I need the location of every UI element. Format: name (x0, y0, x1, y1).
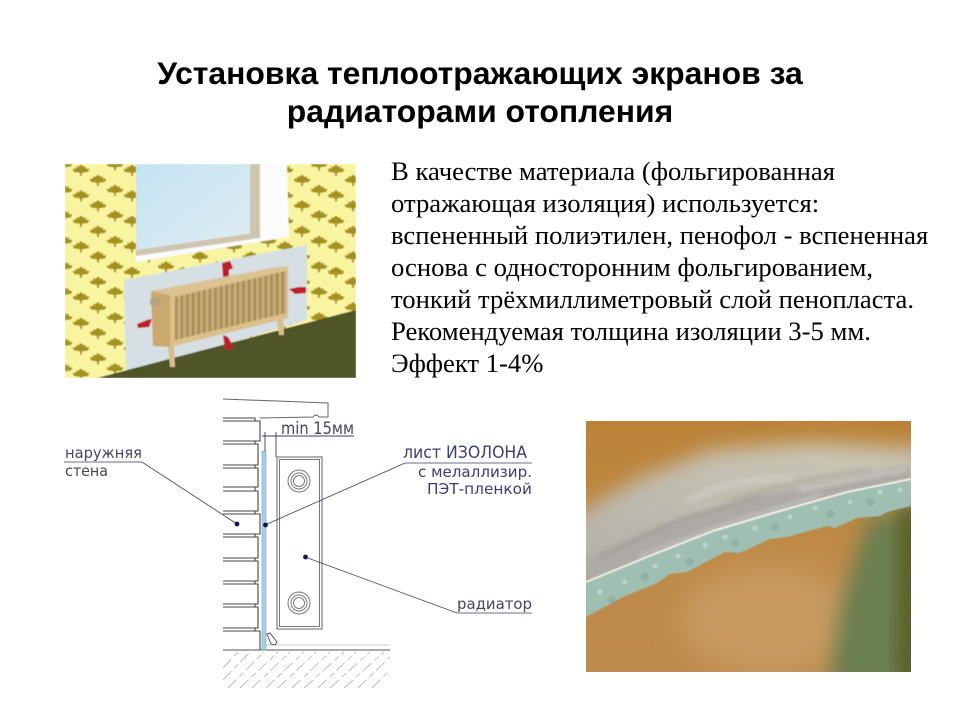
foil surface (560, 442, 935, 595)
white foil edge (586, 479, 911, 582)
radiator slats (175, 271, 286, 340)
radiator body (277, 457, 322, 629)
bracket (267, 633, 277, 645)
label: min distance: min 15мм (281, 419, 354, 439)
text block: material description: Рекомендуемая толщина изоляции 3-5 мм. (391, 316, 871, 346)
label: PET film: ПЭТ-пленкой (427, 480, 532, 498)
window sill (223, 399, 328, 418)
green blurred object (818, 506, 911, 672)
leader dots (235, 522, 308, 559)
label: metallized: с мелаллизир. (418, 463, 532, 481)
leader lines (64, 462, 532, 613)
window glass (136, 164, 250, 250)
foam texture (598, 488, 902, 604)
window frame side (250, 164, 260, 234)
wall bricks (223, 418, 390, 650)
diagram labels (65, 419, 532, 613)
insulation sheet (262, 451, 266, 650)
radiator fittings (288, 470, 310, 614)
floor (97, 310, 356, 378)
photo: foil-faced foam sample (586, 421, 911, 672)
wallpaper (65, 164, 356, 378)
label: wall second line: стена (65, 462, 108, 480)
dimension lines (262, 432, 354, 457)
title: радиаторами отопления (287, 93, 673, 129)
window reveal (136, 164, 289, 262)
label: isolon sheet: лист ИЗОЛОНА (403, 443, 527, 463)
radiator front frame (170, 268, 288, 347)
red arrows (137, 261, 306, 350)
text block: material description: вспененный полиэтилен, пенофол - вспененная (391, 220, 928, 250)
text block: material description: В качестве материала (фольгированная (391, 156, 835, 186)
radiator legs (168, 344, 175, 367)
radiator top (151, 266, 288, 295)
floor hatching (223, 652, 392, 688)
text block: material description: Эффект 1-4% (391, 348, 543, 378)
label: radiator: радиатор (457, 595, 532, 613)
text block: material description: основа с односторонним фольгированием, (391, 252, 873, 282)
image: radiator with reflective screen on wallpapered wall (65, 164, 356, 378)
label: outer wall: наружняя (65, 444, 142, 462)
text block: material description (391, 156, 928, 378)
radiator side (151, 291, 170, 347)
foam edge (586, 480, 911, 617)
photo background (586, 421, 911, 672)
text block: material description: тонкий трёхмиллиметровый слой пенопласта. (391, 284, 914, 314)
diagram: radiator installation section (64, 399, 532, 688)
insulation panel (124, 245, 307, 374)
valve (150, 298, 161, 306)
text block: material description: отражающая изоляция) используется: (391, 188, 819, 218)
title: Установка теплоотражающих экранов за (157, 55, 803, 91)
title (157, 55, 803, 129)
foil streaks (600, 470, 905, 556)
window frame bottom (136, 232, 260, 256)
